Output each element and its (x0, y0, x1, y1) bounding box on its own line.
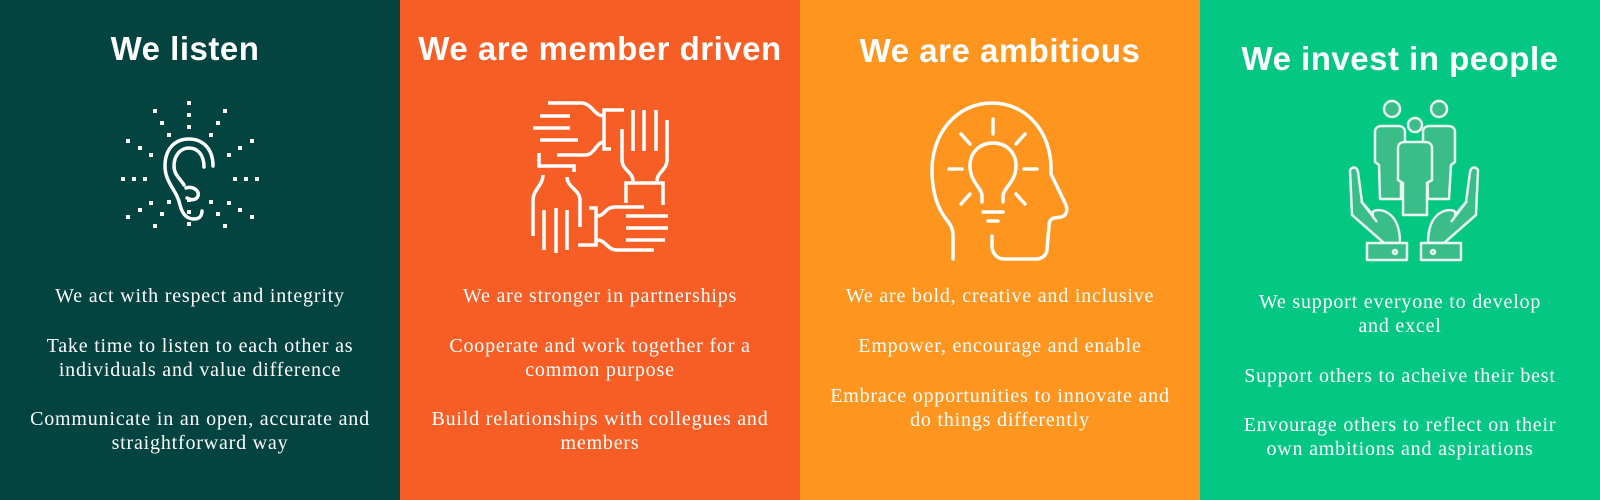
panel: we are member driven: Build relationships with collegues and (431, 408, 769, 430)
title: We are ambitious (860, 32, 1140, 69)
panel: we are ambitious (800, 0, 1200, 500)
text block: and excel (1358, 314, 1442, 336)
icon: four hands (531, 101, 669, 253)
title: We listen (111, 30, 259, 67)
icon: head with lightbulb (930, 101, 1068, 261)
panel: we are member driven: common purpose (525, 358, 675, 380)
icon: hands holding people (1348, 100, 1480, 262)
text block: We are bold, creative and inclusive (846, 285, 1154, 307)
panel: we are member driven: Cooperate and work together for a (449, 335, 751, 357)
panel: we are member driven: members (561, 432, 639, 454)
panel: we listen (0, 0, 400, 500)
title: We invest in people (1242, 40, 1558, 77)
panel: we are ambitious: Embrace opportunities to innovate and (830, 385, 1170, 407)
icon: ear with sound dots (121, 101, 259, 228)
text block: We act with respect and integrity (55, 285, 345, 307)
text block: We support everyone to develop (1259, 291, 1541, 313)
title: We are member driven (418, 30, 782, 67)
panel: we are ambitious: Empower, encourage and enable (858, 335, 1142, 357)
panel: we invest in people: own ambitions and aspirations (1266, 438, 1534, 460)
panel: we are member driven (400, 0, 800, 500)
panel: we listen: straightforward way (112, 432, 288, 454)
panel: we listen: Take time to listen to each other as (47, 335, 353, 357)
panel: we listen: individuals and value difference (59, 358, 341, 380)
panel: we listen: Communicate in an open, accurate and (30, 408, 370, 430)
panel: we invest in people (1200, 0, 1600, 500)
text block (1258, 291, 1541, 336)
panel: we invest in people: Envourage others to reflect on their (1244, 414, 1556, 436)
panel: we are ambitious: do things differently (910, 408, 1090, 430)
text block: We are stronger in partnerships (463, 285, 737, 307)
panel: we invest in people: Support others to acheive their best (1244, 365, 1556, 387)
